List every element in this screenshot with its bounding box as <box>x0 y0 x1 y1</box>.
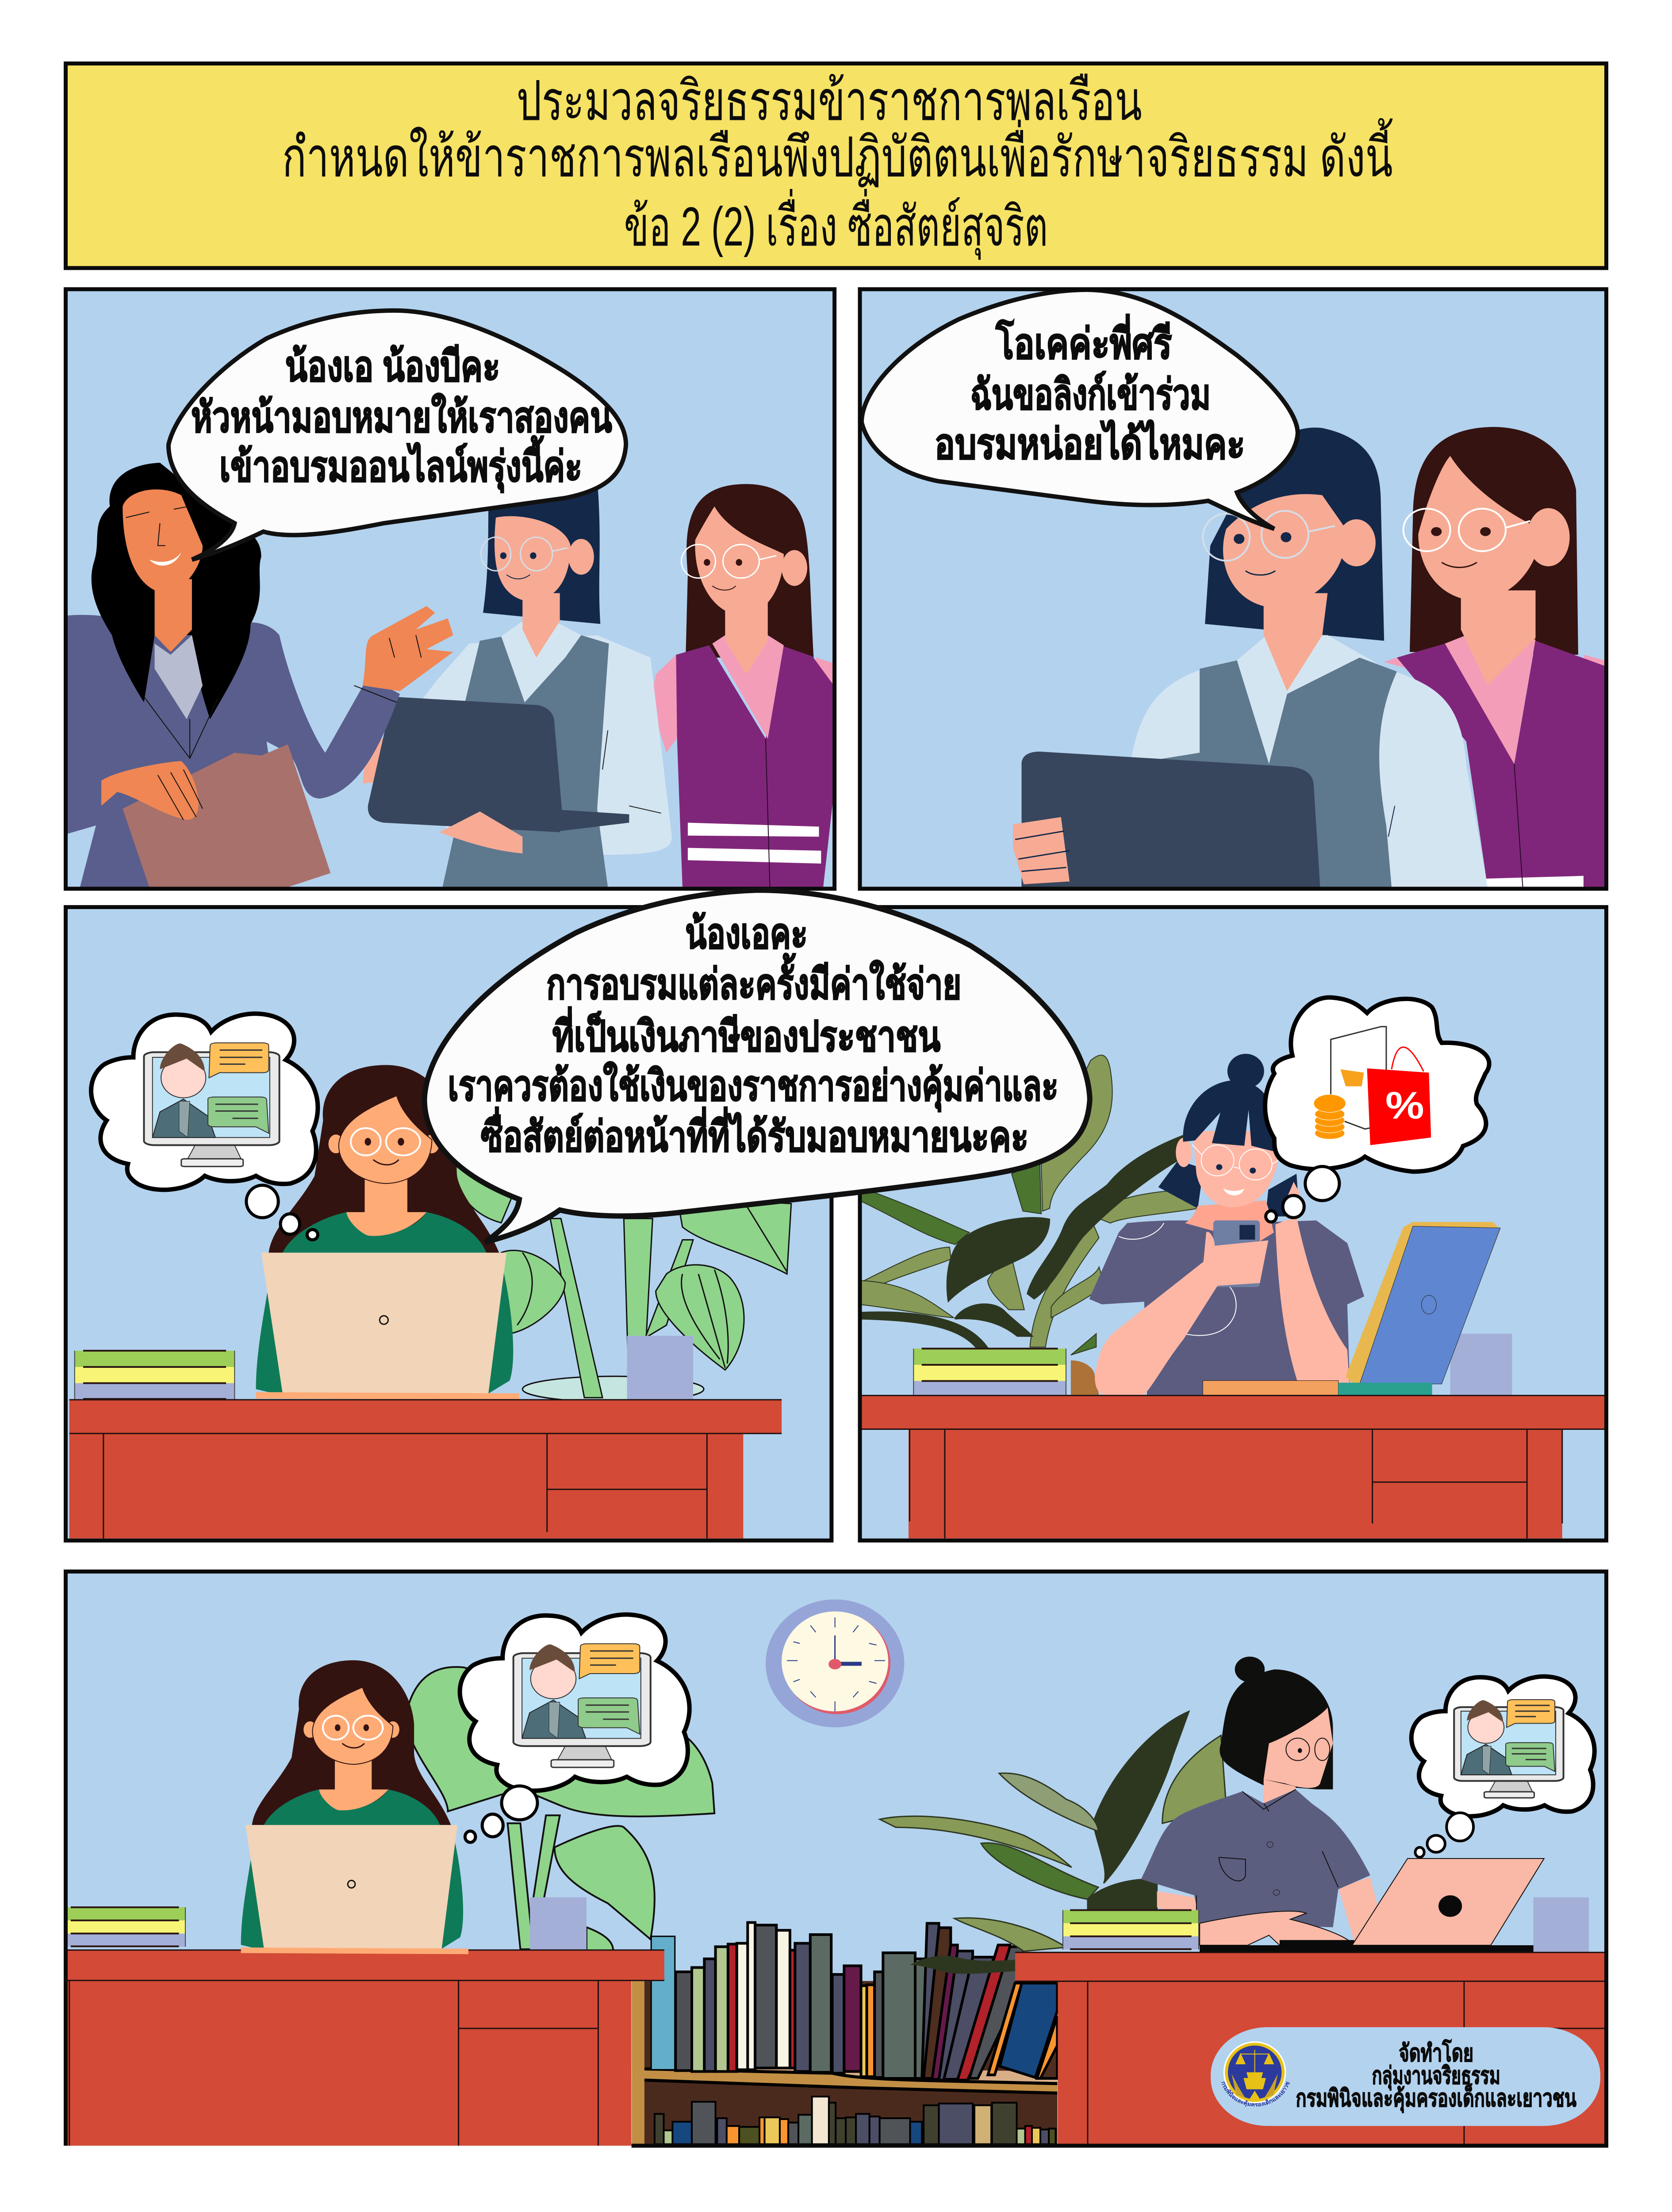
leafy plant <box>859 1055 1198 1355</box>
upper books <box>651 1923 1057 2080</box>
panel 5 border <box>65 1571 1607 2146</box>
thought bubbles small <box>246 1185 318 1240</box>
plant pot <box>1071 1360 1099 1395</box>
laptop pink <box>1352 1859 1544 1945</box>
thought bubbles small <box>1266 1167 1339 1222</box>
panel 2: asking for the link <box>860 289 1607 889</box>
panel borders row 1 and 2 <box>65 289 1607 1540</box>
laptop blue <box>1346 1222 1500 1384</box>
characters panel 2 <box>862 290 1605 887</box>
speech bubble panel 1 <box>169 311 626 560</box>
dialogue panel 2: ฉันขอลิงก์เข้าร่วม <box>970 371 1211 418</box>
coins <box>1314 1094 1346 1139</box>
dialogue panel 2: โอเคค่ะพี่ศรี <box>995 314 1172 367</box>
dialogue panel 1: น้องเอ น้องบีคะ <box>285 343 500 390</box>
hanging leaf <box>910 1956 1017 1974</box>
percent sign on bag: % <box>1385 1084 1424 1127</box>
bookshelf <box>632 1923 1057 2146</box>
panel 3: senior colleague at desk <box>65 907 832 1540</box>
dialogue panel 3: ซื่อสัตย์ต่อหน้าที่ที่ได้รับมอบหมายนะคะ <box>481 1107 1028 1160</box>
stacked books <box>75 1351 234 1399</box>
panel 4: woman shopping on phone <box>859 907 1607 1540</box>
credit text: กลุ่มงานจริยธรรม <box>1372 2062 1500 2090</box>
olive leaf before books <box>955 1918 1066 1951</box>
desk right <box>1015 1952 1605 2146</box>
stacked books left <box>64 1907 185 1947</box>
dialogue panel 3: น้องเอคะ <box>685 910 808 957</box>
scene panel 5 front layer <box>64 1657 1605 2148</box>
jar <box>1450 1334 1512 1395</box>
woman in suit with folder <box>67 463 453 887</box>
woman at laptop <box>256 1065 519 1400</box>
desk <box>69 1400 782 1538</box>
thought cloud right <box>1411 1677 1595 1816</box>
wall clock <box>766 1599 904 1728</box>
desk left <box>64 1950 664 2148</box>
desk <box>862 1395 1605 1538</box>
jar <box>530 1897 587 1950</box>
title line 1: ประมวลจริยธรรมข้าราชการพลเรือน <box>517 70 1142 132</box>
dialogue panel 1: หัวหน้ามอบหมายให้เราสองคน <box>191 393 612 441</box>
phone outline <box>1331 1027 1386 1129</box>
small thought bubbles right <box>1415 1813 1473 1857</box>
credit text <box>1296 2039 1576 2113</box>
woman at laptop left <box>241 1660 468 1954</box>
woman with bun <box>1089 1054 1364 1395</box>
scene panel 3 <box>69 1014 791 1538</box>
potted plant <box>456 1163 791 1402</box>
thought cloud: online trainer <box>91 1014 318 1190</box>
stacked books <box>913 1348 1066 1397</box>
dialogue panel 2 <box>935 314 1245 468</box>
desk and objects panel 4 <box>862 998 1605 1538</box>
character group panel 1 <box>67 311 834 887</box>
dialogue panel 1: เข้าอบรมออนไลน์พรุ่งนี้ค่ะ <box>219 435 582 493</box>
woman at computer <box>1141 1657 1386 1945</box>
dialogue panel 2: อบรมหน่อยได้ไหมคะ <box>935 420 1245 468</box>
small thought bubbles left <box>465 1786 537 1843</box>
title line 3: ข้อ 2 (2) เรื่อง ซื่อสัตย์สุจริต <box>624 189 1048 260</box>
woman in grey vest close-up <box>1013 427 1488 887</box>
stacked books right <box>1063 1910 1199 1950</box>
monstera plant <box>405 1667 714 1951</box>
dialogue panel 3: ที่เป็นเงินภาษีของประชาชน <box>552 1007 940 1060</box>
thought cloud left <box>460 1615 690 1791</box>
speech bubble panel 2 <box>862 290 1298 529</box>
plant and woman <box>859 1054 1364 1395</box>
jar right <box>1534 1897 1589 1952</box>
dialogue panel 3: การอบรมแต่ละครั้งมีค่าใช้จ่าย <box>546 953 962 1008</box>
notebook <box>1203 1381 1338 1395</box>
department seal: กรมพินิจและคุ้มครองเด็กและเยาวชน <box>0 0 1291 2108</box>
woman in purple vest close-up <box>1384 427 1605 887</box>
desk bar <box>1200 1940 1535 1952</box>
scene panel 5 back layer <box>405 1599 1226 1951</box>
dialogue panel 3 <box>448 910 1058 1160</box>
tablet base <box>1338 1382 1432 1395</box>
title banner <box>65 63 1607 268</box>
panel 1: supervisor assigns training <box>65 289 835 889</box>
shelf frame <box>632 1981 1057 2146</box>
jar <box>627 1336 693 1400</box>
cart <box>1340 1069 1364 1087</box>
lower books <box>655 2097 1056 2144</box>
thought cloud: shopping <box>1265 998 1489 1171</box>
right plant <box>880 1711 1226 1911</box>
speech bubble panel 3 <box>424 890 1090 1242</box>
credit text: จัดทำโดย <box>1399 2039 1473 2066</box>
dialogue panel 1 <box>191 343 612 493</box>
woman in purple vest <box>651 484 834 887</box>
shopping bag <box>1392 1047 1423 1071</box>
dialogue panel 3: เราควรต้องใช้เงินของราชการอย่างคุ้มค่าและ <box>448 1062 1058 1112</box>
woman in grey vest with laptop <box>363 478 672 887</box>
